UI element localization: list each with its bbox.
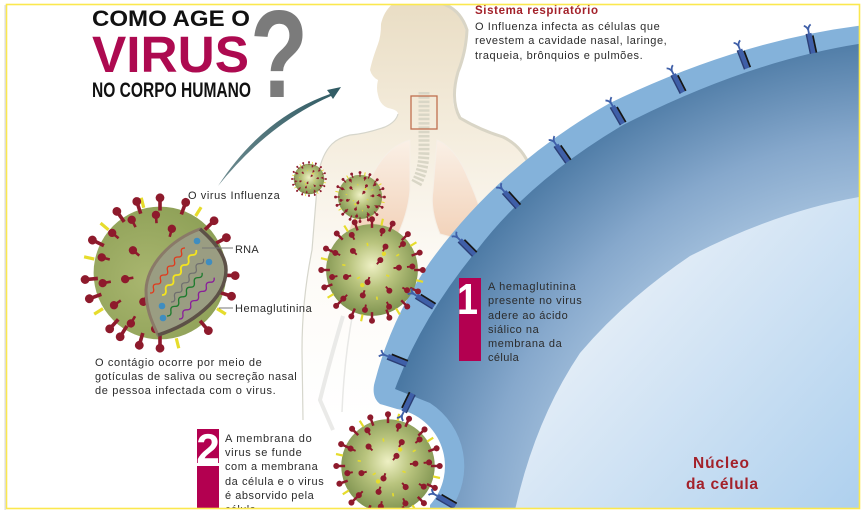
step 2 text: virus se funde — [225, 447, 302, 459]
highlighted larynx box — [411, 96, 437, 129]
contagion text: de pessoa infectada com o virus. — [95, 385, 276, 397]
title line 1: COMO AGE O — [92, 6, 250, 31]
left lung — [348, 165, 410, 232]
step 2 text: da célula e o virus — [225, 476, 324, 488]
step 1 badge: 1 — [457, 275, 478, 324]
medium virus — [318, 216, 426, 324]
respiratory body: O Influenza infecta as células que — [475, 21, 660, 33]
RNA green strand — [167, 273, 202, 316]
human body — [301, 5, 528, 430]
nucleus label — [686, 455, 758, 493]
blue particles — [159, 238, 212, 321]
step 1 text: presente no virus — [488, 295, 582, 307]
nucleus — [515, 196, 861, 510]
cytoplasm — [395, 43, 861, 510]
cell — [374, 25, 861, 513]
step 1 text — [488, 281, 582, 364]
torso line — [342, 312, 353, 412]
RNA yellow strand — [162, 250, 196, 295]
step 2 text: A membrana do — [225, 433, 312, 445]
small virus 2 — [334, 171, 386, 223]
cell membrane — [374, 25, 861, 513]
body silhouette — [309, 5, 526, 272]
trachea and bronchi — [416, 92, 424, 184]
contagion text — [95, 357, 297, 397]
step 2 text — [225, 433, 324, 513]
arm inner line — [320, 316, 343, 430]
respiratory body: traqueia, brônquios e pulmões. — [475, 50, 643, 62]
virus at membrane — [333, 411, 443, 513]
step 1 text: siálico na — [488, 324, 540, 336]
cutaway shell — [146, 229, 226, 335]
nucleus label: Núcleo — [693, 455, 749, 472]
virus sphere — [80, 193, 240, 353]
shoulder and neck shading — [444, 5, 528, 160]
small virus 1 — [291, 161, 327, 197]
nucleus label: da célula — [686, 476, 758, 493]
RNA purple strand — [179, 278, 214, 319]
cutaway inner rim — [158, 229, 226, 335]
respiratory system text — [475, 5, 667, 62]
left shadow — [4, 5, 6, 510]
right lung — [432, 165, 478, 237]
step 2 text: com a membrana — [225, 461, 319, 473]
step 2 badge — [196, 425, 220, 509]
respiratory body — [475, 21, 667, 62]
outline left shoulder — [302, 114, 398, 420]
RNA grey strand — [171, 259, 204, 302]
title — [92, 10, 302, 97]
RNA red strand — [150, 248, 185, 293]
respiratory body: revestem a cavidade nasal, laringe, — [475, 35, 667, 47]
step 1 text: adere ao ácido — [488, 310, 568, 322]
label: Hemaglutinina: Hemaglutinina — [235, 303, 313, 315]
step 1 badge — [457, 275, 481, 361]
label: RNA: RNA — [235, 244, 259, 256]
step 2 text: é absorvido pela — [225, 490, 315, 502]
step 1 text: A hemaglutinina — [488, 281, 577, 293]
step 1 text: célula — [488, 352, 520, 364]
contagion text: gotículas de saliva ou secreção nasal — [95, 371, 297, 383]
title line 2: VIRUS — [92, 26, 249, 83]
label: O virus Influenza: O virus Influenza — [188, 190, 281, 202]
arrow — [218, 87, 341, 186]
respiratory heading: Sistema respiratório — [475, 5, 598, 17]
label: RNA — [202, 246, 259, 253]
contagion text: O contágio ocorre por meio de — [95, 357, 262, 369]
title line 3: NO CORPO HUMANO — [92, 79, 251, 102]
large virus cutaway — [80, 193, 240, 353]
step 1 text: membrana da — [488, 338, 563, 350]
step 2 badge: 2 — [196, 425, 220, 472]
receptors — [379, 24, 817, 509]
